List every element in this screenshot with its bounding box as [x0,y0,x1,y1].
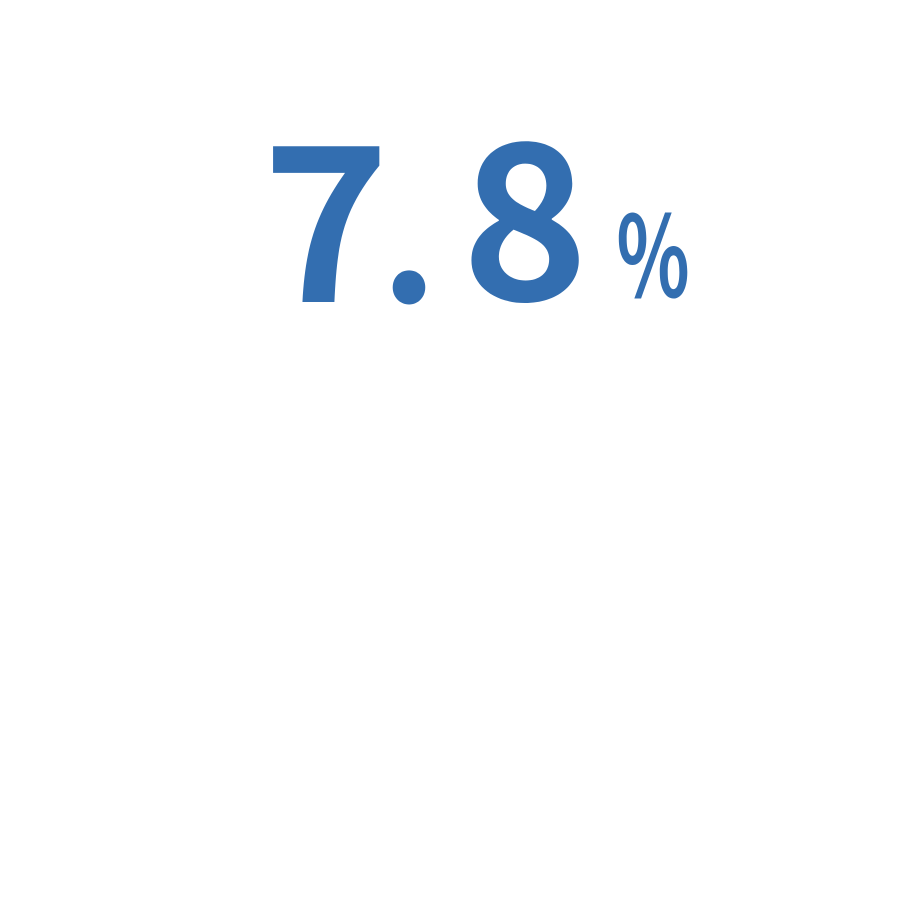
digit 8: 8 [461,50,589,363]
percent sign: % [616,167,690,330]
digit 7: 7 [262,52,390,365]
decimal point: . [380,97,438,354]
